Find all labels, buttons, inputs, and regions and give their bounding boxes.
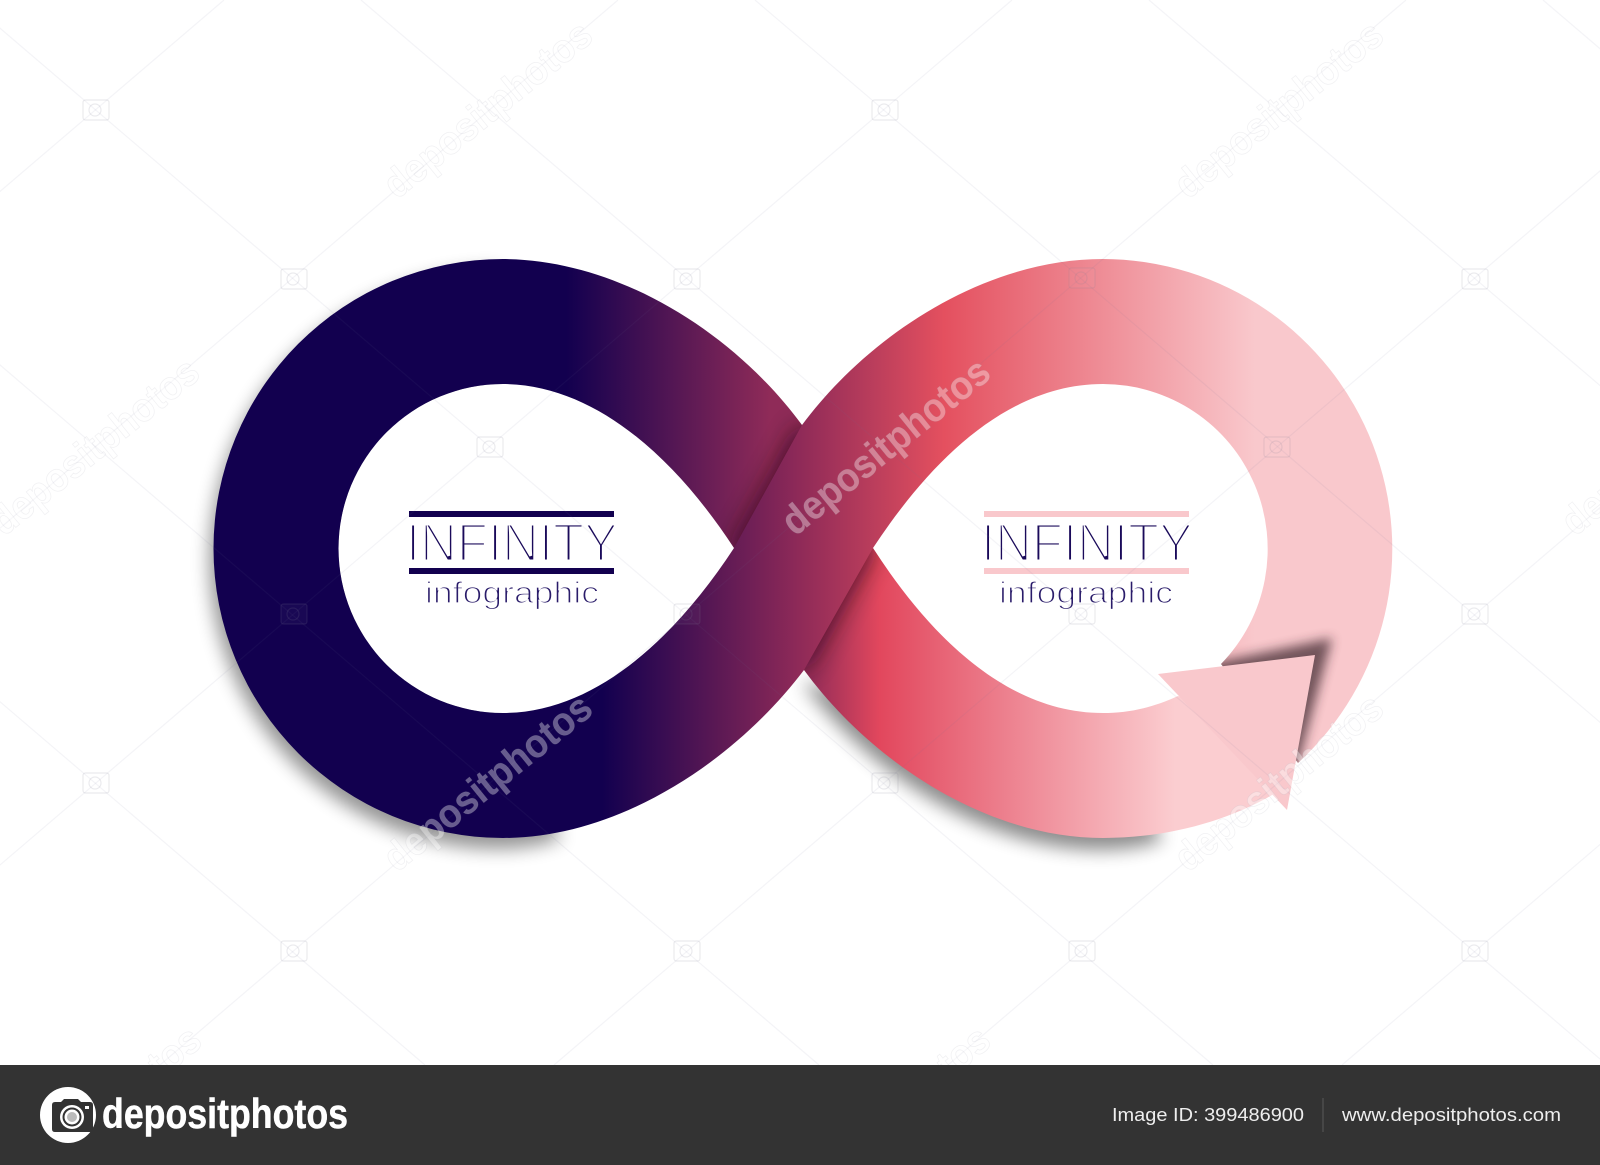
crossing shadow on lower-right strand — [804, 548, 885, 678]
left title text: INFINITY — [406, 513, 618, 573]
right label: INFINITY infographic — [981, 511, 1193, 610]
right hole backing — [873, 384, 1255, 713]
crossing shadow on upper-left strand — [724, 416, 802, 548]
left hole backing — [338, 384, 734, 713]
under strand: lower right — [800, 548, 1278, 838]
arrow head — [1158, 655, 1315, 810]
arrow shadow on ring — [1221, 632, 1338, 763]
icon: camera logo — [40, 1087, 96, 1143]
watermark wordmarks: depositphotos — [375, 685, 601, 880]
image id: Image ID: 399486900 — [1112, 1104, 1304, 1125]
right bottom rule — [984, 568, 1189, 574]
under strand: upper left — [502, 259, 802, 548]
watermark wordmarks: depositphotos — [1166, 685, 1392, 880]
watermark wordmarks: depositphotos — [1166, 12, 1392, 207]
watermark wordmarks: depositphotos — [375, 12, 601, 207]
left loop C-shape — [213, 259, 503, 838]
left top rule — [409, 511, 614, 517]
ground shadow: right lower strand — [802, 682, 1163, 850]
watermark wordmarks: depositphotos — [773, 349, 999, 544]
watermark camera icons — [83, 100, 1488, 961]
left subtitle: infographic — [425, 575, 599, 610]
left bottom rule — [409, 568, 614, 574]
logo wordmark: depositphotos — [102, 1090, 348, 1137]
ground shadow: left loop — [209, 270, 561, 849]
right loop upper ring — [1102, 259, 1392, 763]
website url: www.depositphotos.com — [1341, 1104, 1561, 1125]
infinity ribbon — [213, 259, 1392, 838]
left label: INFINITY infographic — [406, 511, 618, 610]
right subtitle: infographic — [999, 575, 1173, 610]
over strand crossing — [503, 259, 1103, 838]
footer bar — [0, 1065, 1600, 1165]
right title text: INFINITY — [981, 513, 1193, 573]
right top rule — [984, 511, 1189, 517]
